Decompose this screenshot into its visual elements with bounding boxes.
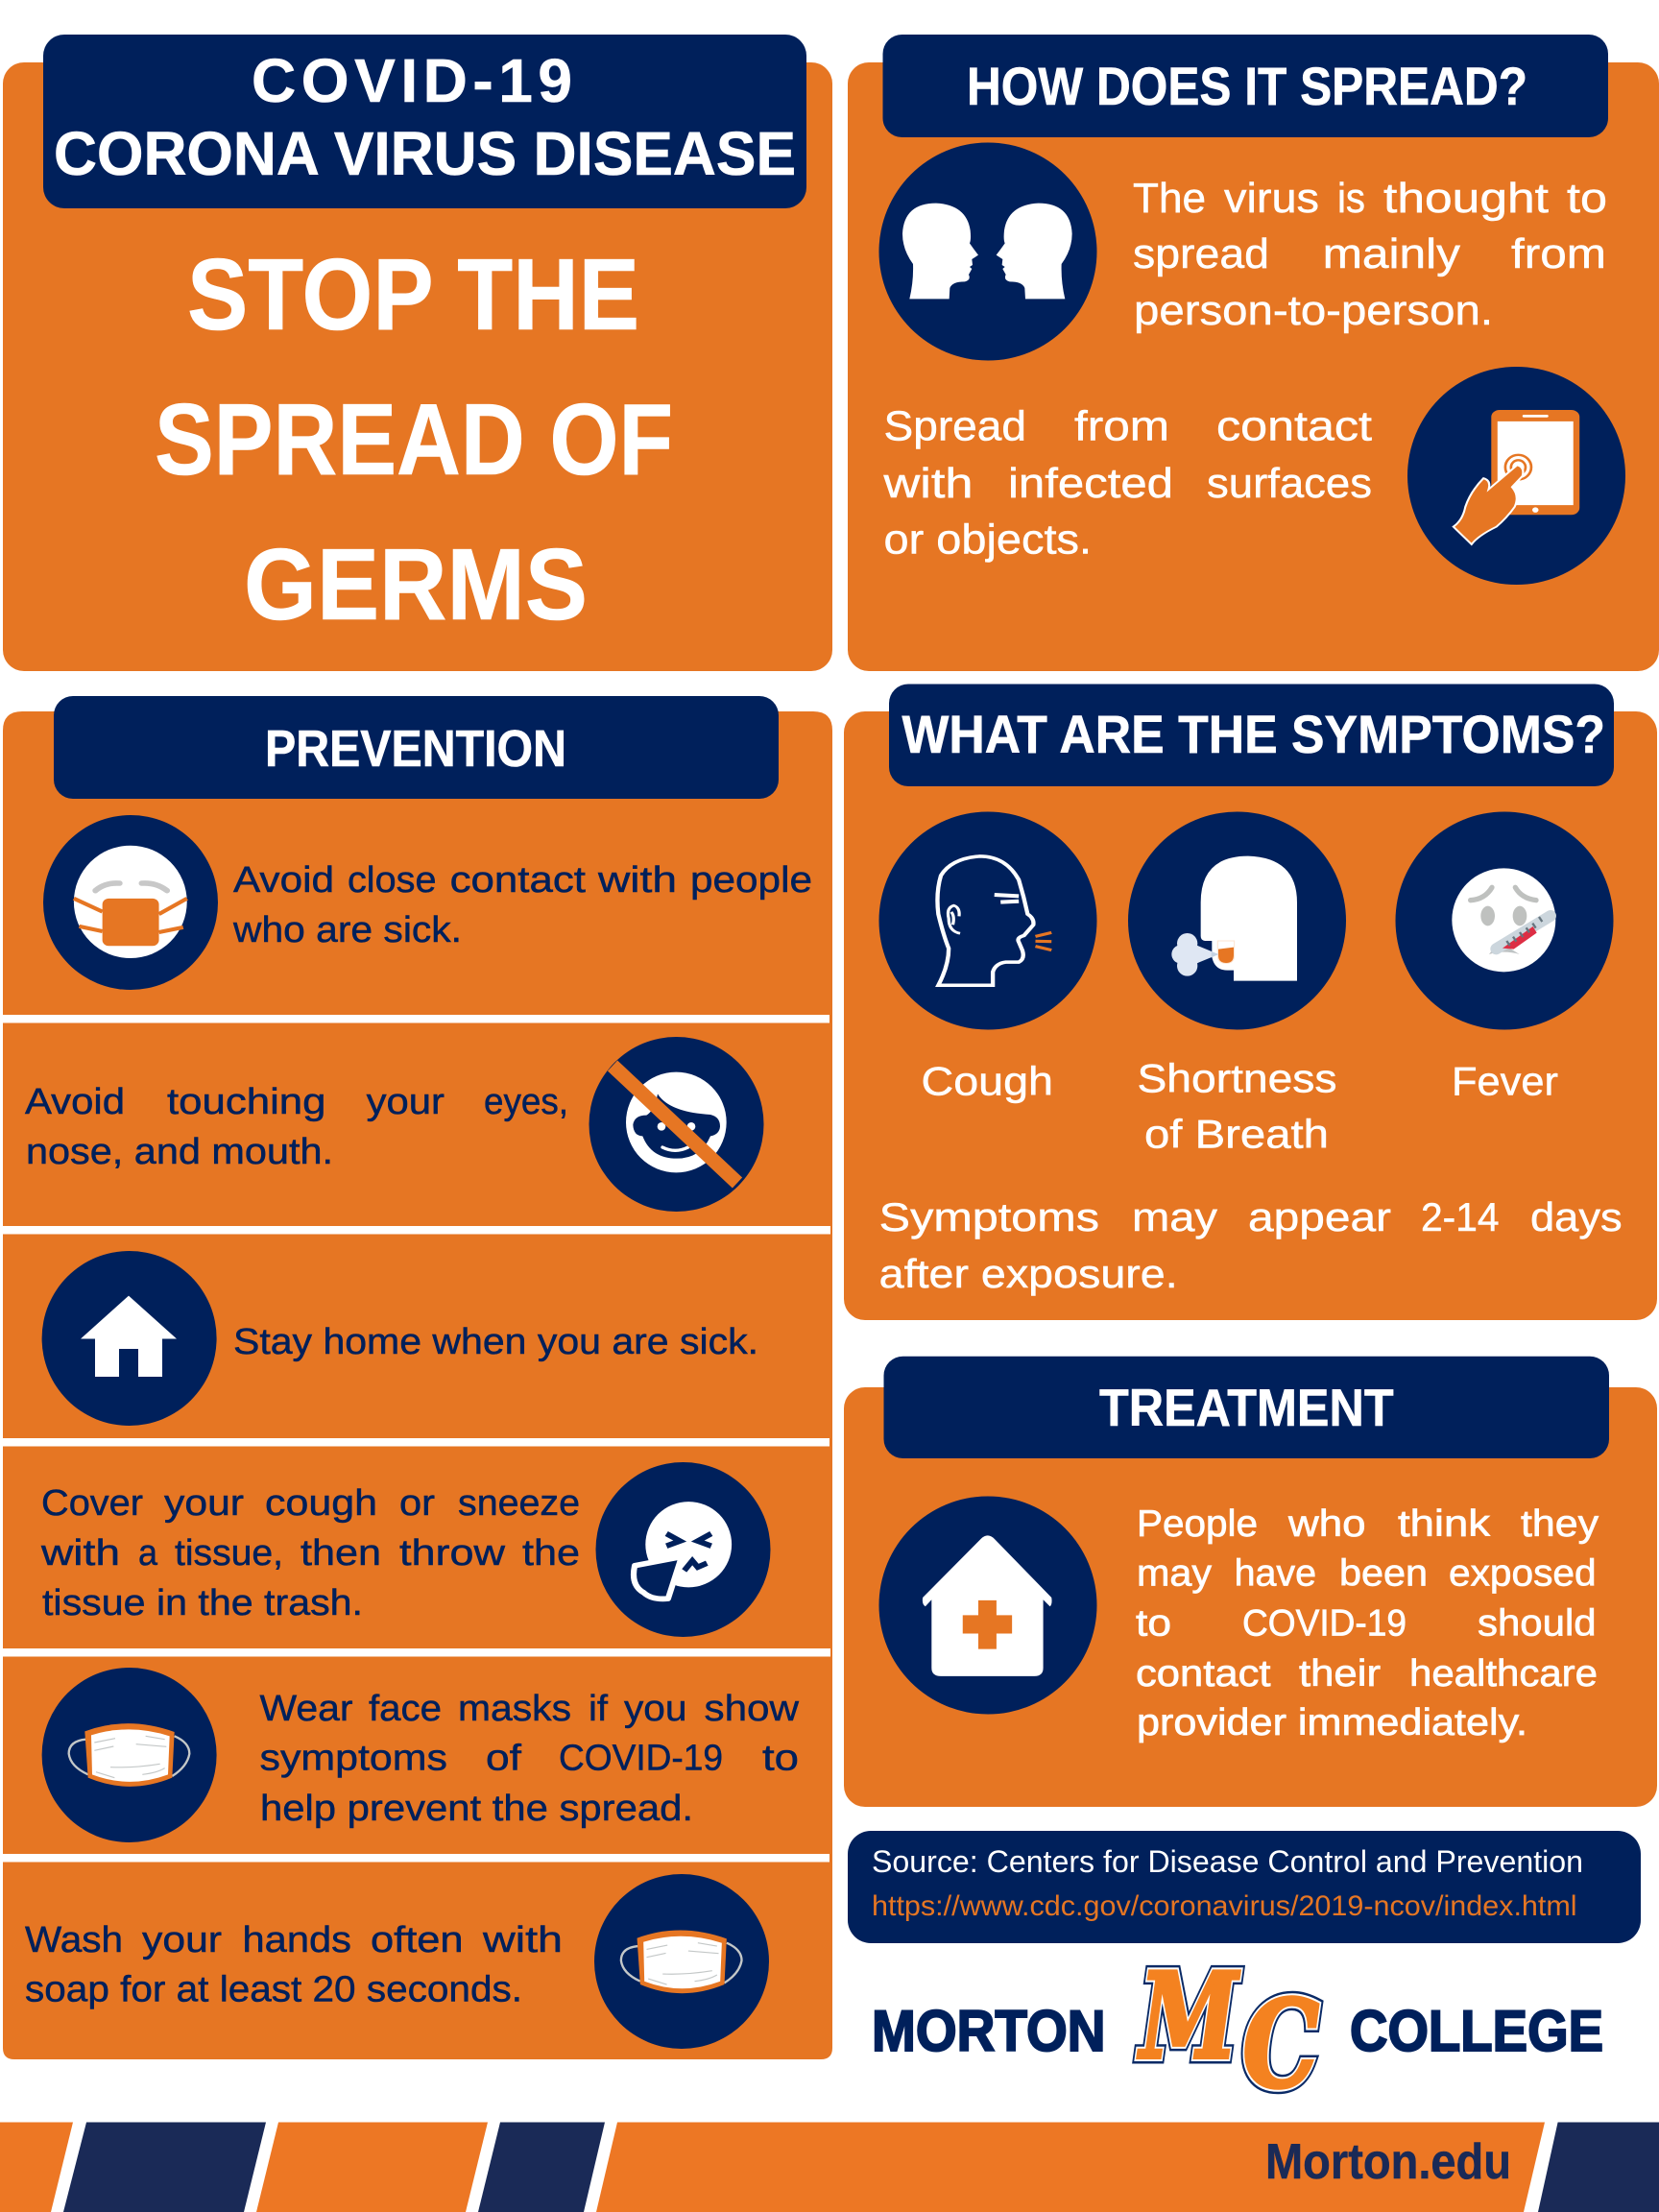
panel: how does it spread — [848, 35, 1659, 671]
text: treatment advice: provider immediately. — [1137, 1702, 1527, 1743]
icon: face with mask — [43, 815, 218, 990]
text: person to person: from — [1511, 230, 1606, 277]
text: wear face masks: COVID-19 — [559, 1739, 723, 1779]
logo: Morton College — [872, 1948, 1603, 2115]
logo mark: MC: M — [1130, 1948, 1247, 2086]
panel: prevention — [0, 696, 832, 2059]
icon: no face touching — [589, 1037, 764, 1212]
main heading: SPREAD OF — [155, 383, 673, 496]
text: treatment advice: think — [1398, 1503, 1491, 1545]
text: cover your cough: with — [40, 1533, 120, 1574]
text: cover your cough: or — [399, 1483, 435, 1524]
text: person to person: thought — [1383, 175, 1549, 222]
text: treatment advice: they — [1521, 1503, 1599, 1545]
text: treatment advice: been — [1339, 1553, 1428, 1595]
text: avoid close contact: Avoid — [233, 860, 334, 901]
panel: symptoms — [844, 684, 1657, 1320]
labels: symptoms — [922, 1056, 1558, 1157]
text: wash your hands: often — [371, 1920, 464, 1960]
text: cover your cough: tissue in the trash. — [42, 1583, 363, 1623]
text: wash your hands — [25, 1920, 563, 2010]
text: contact with surfaces: or objects. — [883, 517, 1092, 563]
text: wear face masks: to — [762, 1739, 799, 1779]
text: avoid close contact: contact — [450, 860, 586, 901]
text: wear face masks — [259, 1689, 800, 1829]
footer band — [0, 2122, 1659, 2212]
text: cover your cough: then — [301, 1533, 381, 1574]
text: contact with surfaces: from — [1074, 403, 1169, 449]
text: person to person: to — [1567, 175, 1607, 222]
labels: symptoms: of Breath — [1144, 1112, 1329, 1157]
main heading: STOP THE — [187, 238, 639, 351]
text: wear face masks: Wear — [259, 1689, 353, 1729]
text: wash your hands: with — [482, 1920, 563, 1960]
icon: house — [42, 1251, 217, 1426]
heading: treatment: TREATMENT — [1099, 1378, 1394, 1437]
text: treatment advice: exposed — [1449, 1553, 1597, 1595]
heading: how does it spread: HOW DOES IT SPREAD? — [967, 56, 1527, 116]
text: cover your cough: the — [522, 1533, 580, 1574]
text: wash your hands: your — [142, 1920, 222, 1960]
heading: how does it spread — [883, 35, 1608, 137]
text: contact with surfaces: infected — [1008, 460, 1173, 507]
text: person to person: is — [1337, 175, 1365, 222]
text: wear face masks: face — [369, 1689, 442, 1729]
heading: treatment — [883, 1357, 1609, 1458]
icon: cough — [879, 812, 1096, 1029]
text: contact with surfaces: contact — [1216, 403, 1372, 449]
text: cover your cough: a — [138, 1533, 158, 1574]
heading: symptoms: WHAT ARE THE SYMPTOMS? — [902, 704, 1605, 764]
panel: source: https://www.cdc.gov/coronavirus/2019-ncov/index.html — [872, 1890, 1577, 1922]
logo: Morton College: MORTON — [872, 1999, 1106, 2063]
text: treatment advice: should — [1478, 1603, 1597, 1645]
text: treatment advice — [1136, 1503, 1599, 1743]
logo mark: MC: C — [1233, 1974, 1330, 2115]
icon: surgical mask second — [594, 1874, 769, 2049]
heading: prevention — [54, 696, 779, 799]
text: symptoms timing — [879, 1194, 1623, 1296]
text: person to person: mainly — [1323, 230, 1460, 277]
panel: source: Source: Centers for Disease Control and Prevention — [872, 1844, 1583, 1879]
panel: source — [848, 1831, 1641, 1943]
text: person to person: virus — [1224, 175, 1319, 222]
text: cover your cough — [40, 1483, 580, 1623]
text: contact with surfaces: with — [882, 460, 974, 507]
text: avoid close contact: close — [348, 860, 436, 901]
icon: shortness of breath — [1128, 812, 1346, 1029]
text: wash your hands: soap for at least 20 seconds. — [25, 1970, 522, 2010]
text: cover your cough: throw — [399, 1533, 506, 1574]
text: contact with surfaces — [882, 403, 1372, 563]
main heading — [155, 238, 673, 641]
logo mark: MC: M — [1130, 1948, 1247, 2086]
text: treatment advice: to — [1136, 1603, 1171, 1645]
text: avoid close contact: who are sick. — [232, 910, 462, 950]
text: symptoms timing: may — [1132, 1194, 1217, 1239]
icon: fever — [1396, 812, 1613, 1029]
text: avoid touching: eyes, — [484, 1082, 568, 1122]
text: symptoms timing: appear — [1248, 1194, 1391, 1239]
text: treatment advice: may — [1137, 1553, 1213, 1595]
text: cover your cough: Cover — [41, 1483, 143, 1524]
heading: prevention: PREVENTION — [265, 720, 566, 778]
text: wash your hands: hands — [242, 1920, 351, 1960]
text: wear face masks: help prevent the spread. — [260, 1789, 693, 1829]
text: treatment advice: healthcare — [1409, 1653, 1598, 1695]
text: wear face masks: of — [486, 1739, 522, 1779]
text: wear face masks: if — [589, 1689, 608, 1729]
text: contact with surfaces: Spread — [883, 403, 1026, 449]
text: avoid touching — [25, 1082, 568, 1172]
text: stay home: Stay home when you are sick. — [233, 1322, 758, 1362]
text: avoid touching: touching — [167, 1082, 326, 1122]
icon: hand touching tablet — [1407, 367, 1625, 585]
text: treatment advice: who — [1287, 1503, 1365, 1545]
text: wear face masks: you — [624, 1689, 687, 1729]
text: wear face masks: show — [705, 1689, 800, 1729]
text: wear face masks: symptoms — [259, 1739, 447, 1779]
icon: surgical mask — [42, 1668, 217, 1842]
text: avoid touching: nose, and mouth. — [26, 1132, 333, 1172]
text: cover your cough: sneeze — [458, 1483, 580, 1524]
text: avoid close contact: people — [690, 860, 812, 901]
labels: symptoms: Shortness — [1137, 1056, 1336, 1100]
panel: title — [3, 35, 832, 671]
footer website: Morton.edu — [1265, 2134, 1511, 2190]
logo mark: MC — [1130, 1948, 1330, 2115]
text: treatment advice: their — [1299, 1653, 1381, 1695]
text: person to person — [1133, 175, 1607, 334]
text: person to person: The — [1133, 175, 1206, 222]
icon: two heads — [879, 142, 1096, 361]
text: symptoms timing: 2-14 — [1421, 1194, 1500, 1239]
icon: medical house — [879, 1496, 1096, 1715]
text: avoid close contact — [232, 860, 812, 950]
text: symptoms timing: after exposure. — [879, 1251, 1178, 1296]
labels: symptoms: Fever — [1452, 1059, 1558, 1104]
panel: treatment — [844, 1357, 1657, 1807]
text: treatment advice: COVID-19 — [1242, 1603, 1407, 1645]
text: treatment advice: have — [1235, 1553, 1316, 1595]
text: wear face masks: masks — [458, 1689, 571, 1729]
text: avoid touching: Avoid — [25, 1082, 125, 1122]
logo mark: MC: M — [1130, 1948, 1247, 2086]
logo: Morton College: COLLEGE — [1350, 1999, 1603, 2063]
icon: sneeze into tissue — [595, 1462, 770, 1637]
text: cover your cough: your — [164, 1483, 244, 1524]
labels: symptoms: Cough — [922, 1059, 1053, 1104]
title header bar: CORONA VIRUS DISEASE — [54, 119, 796, 188]
text: cover your cough: tissue, — [175, 1533, 283, 1574]
text: cover your cough: cough — [265, 1483, 377, 1524]
text: symptoms timing: Symptoms — [879, 1194, 1099, 1239]
text: avoid touching: your — [367, 1082, 445, 1122]
text: wash your hands: Wash — [25, 1920, 123, 1960]
logo mark: MC: C — [1233, 1974, 1330, 2115]
text: person to person: person-to-person. — [1134, 287, 1493, 334]
logo mark: MC: C — [1233, 1974, 1330, 2115]
text: avoid close contact: with — [597, 860, 677, 901]
heading: symptoms — [889, 684, 1614, 786]
text: treatment advice: contact — [1136, 1653, 1271, 1695]
text: person to person: spread — [1133, 230, 1269, 277]
title header bar — [43, 35, 806, 208]
text: treatment advice: People — [1137, 1503, 1258, 1545]
title header bar: COVID-19 — [252, 46, 572, 115]
text: symptoms timing: days — [1530, 1194, 1623, 1239]
text: contact with surfaces: surfaces — [1207, 460, 1372, 507]
main heading: GERMS — [244, 528, 588, 641]
